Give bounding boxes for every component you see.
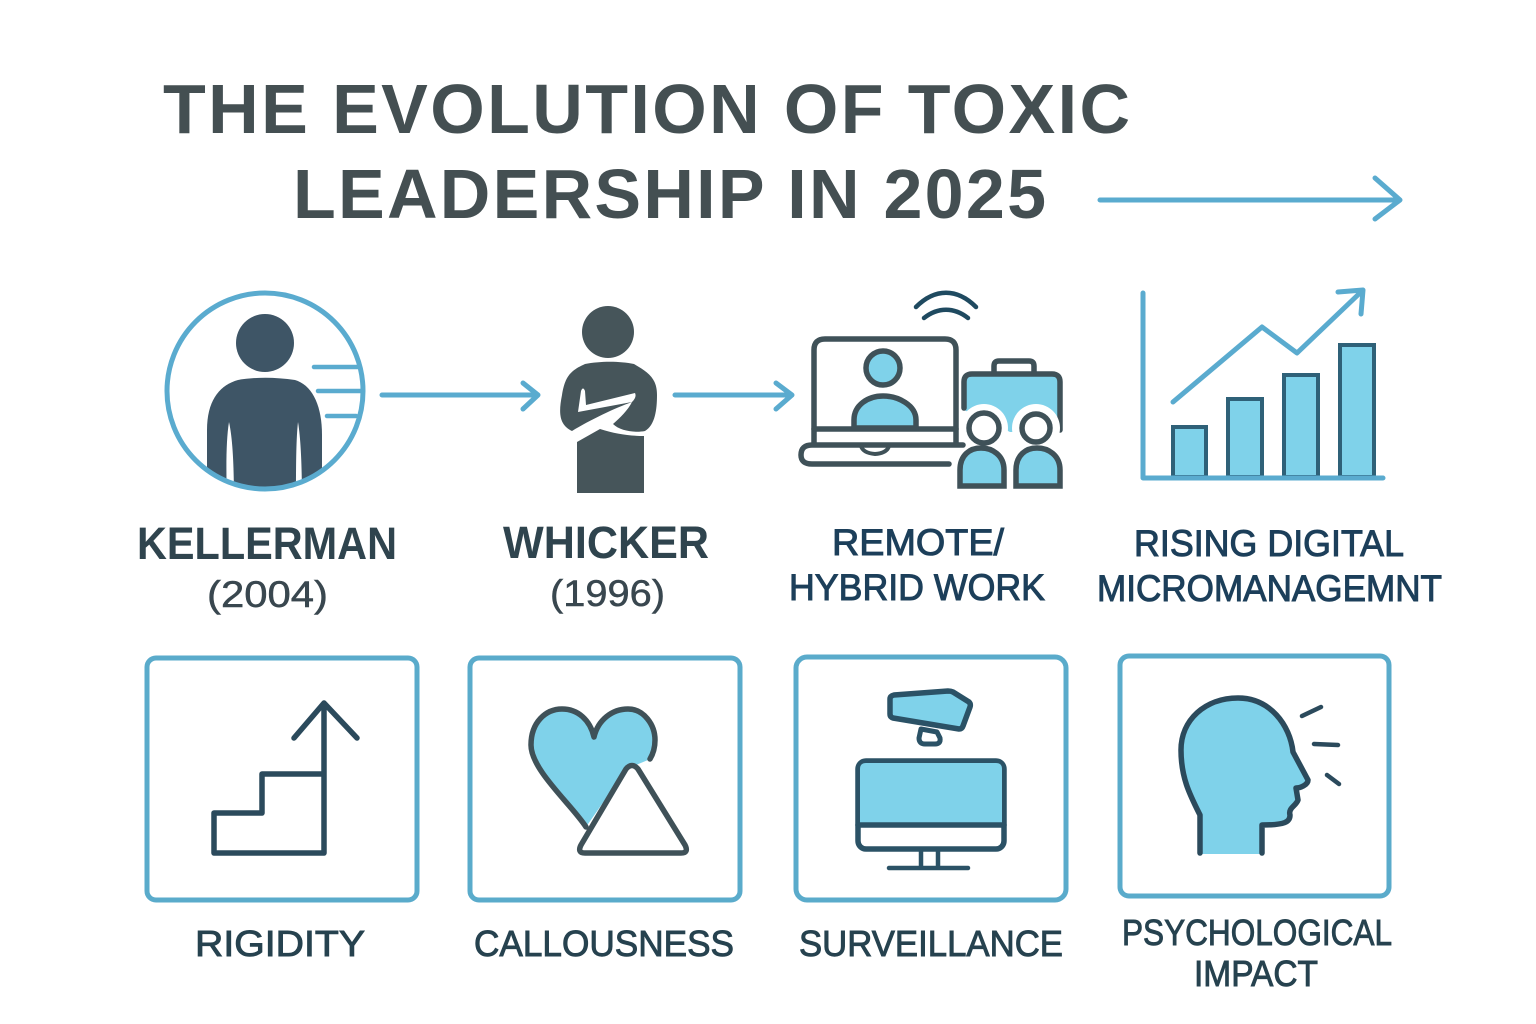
- icon: stairs with arrow: [214, 703, 357, 853]
- label: Kellerman: [137, 518, 397, 615]
- title: [163, 70, 1130, 233]
- label: callousness: CALLOUSNESS: [474, 923, 734, 964]
- arrow: Whicker to remote work: [675, 383, 792, 409]
- chart: rising digital micromanagement: [1143, 290, 1383, 478]
- icon: head profile with signals: [1181, 698, 1339, 854]
- label: rising digital micromanagement: [1097, 523, 1442, 609]
- label: remote/hybrid work: HYBRID WORK: [789, 567, 1045, 608]
- label: Whicker: WHICKER: [503, 517, 709, 568]
- title: THE EVOLUTION OF TOXIC: [163, 70, 1130, 148]
- label: psychological impact: PSYCHOLOGICAL: [1122, 912, 1392, 953]
- title: LEADERSHIP IN 2025: [293, 155, 1046, 233]
- label: Kellerman: KELLERMAN: [137, 518, 397, 569]
- panel: rigidity: [147, 658, 417, 900]
- panel: psychological impact: [1120, 656, 1389, 896]
- icon: Kellerman leader in circle: [167, 293, 363, 500]
- arrow: Kellerman to Whicker: [382, 383, 538, 409]
- label: rising digital micromanagement: RISING DIGITAL: [1134, 523, 1404, 564]
- label: Whicker: (1996): [550, 573, 665, 614]
- label: remote/hybrid work: [789, 522, 1045, 608]
- label: remote/hybrid work: REMOTE/: [832, 522, 1005, 563]
- label: Kellerman: (2004): [207, 574, 328, 615]
- icon: Whicker figure with crossed arms: [560, 306, 657, 493]
- label: surveillance: SURVEILLANCE: [799, 923, 1063, 964]
- label: psychological impact: [1122, 912, 1392, 994]
- panel: surveillance: [796, 657, 1066, 900]
- label: psychological impact: IMPACT: [1194, 953, 1318, 994]
- infographic canvas: [140, 84, 1442, 987]
- label: rising digital micromanagement: MICROMANAGEMNT: [1097, 568, 1442, 609]
- icon: camera and monitor: [858, 691, 1004, 868]
- arrow: title timeline: [1100, 178, 1400, 219]
- label: rigidity: RIGIDITY: [195, 923, 365, 964]
- icon: heart and triangle: [531, 709, 686, 853]
- panel: callousness: [470, 658, 740, 900]
- icon: remote and hybrid work: [801, 293, 1060, 486]
- label: Whicker: [503, 517, 709, 614]
